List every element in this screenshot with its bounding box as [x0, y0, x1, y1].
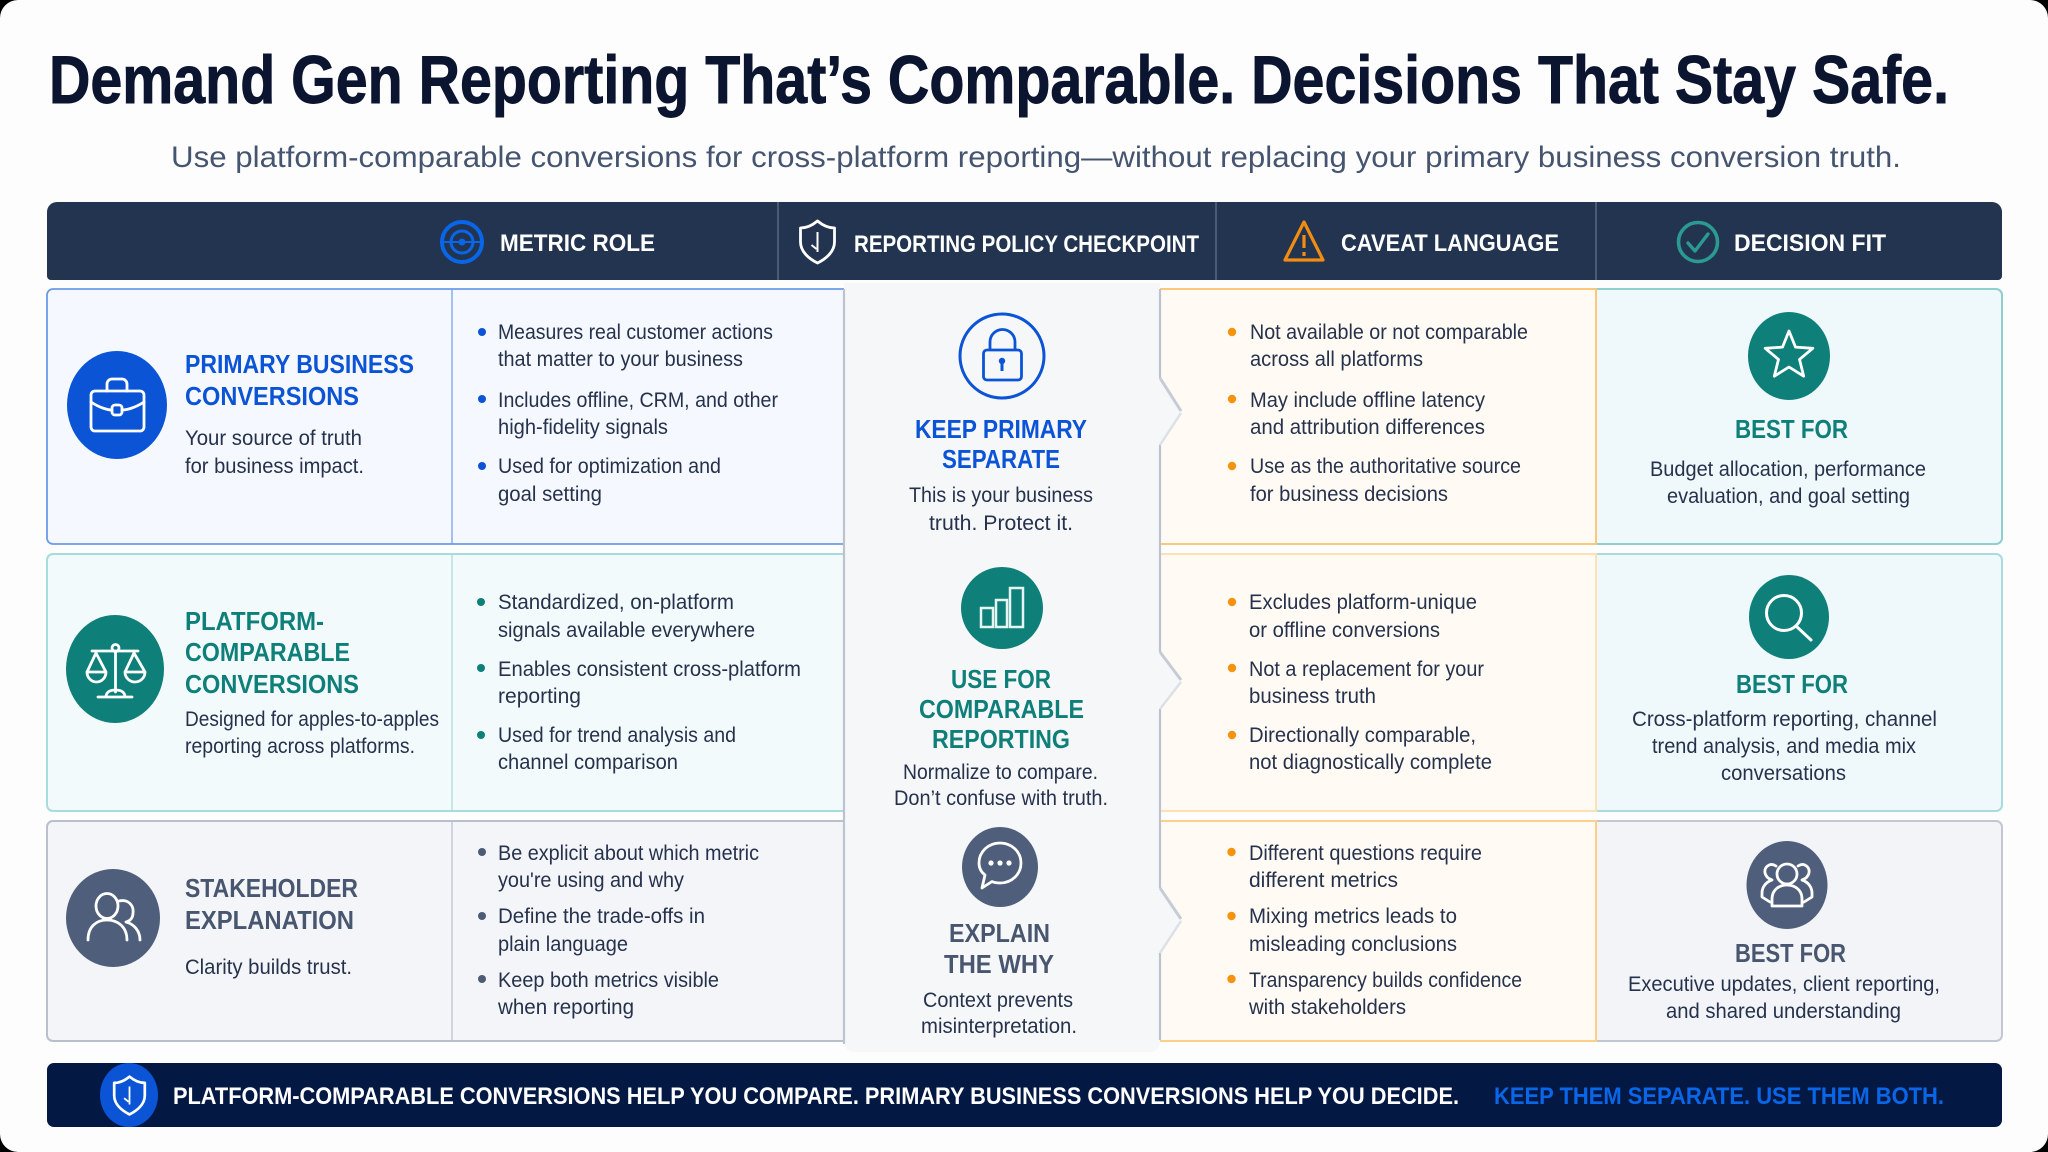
- icon: banner shield: [100, 1063, 158, 1127]
- panel: row 1 caveats: [1150, 289, 1596, 544]
- panel: row 2 caveats: Excludes platform-unique: [1249, 591, 1477, 614]
- best for text: conversations: [1721, 762, 1846, 785]
- row description: [185, 708, 439, 758]
- panel: row 3 decision fit background: [1580, 821, 2002, 1041]
- panel: row 3 caveats: Transparency builds confidence: [1249, 969, 1522, 992]
- icon: group: [1746, 841, 1828, 929]
- heading: caveat language: CAVEAT LANGUAGE: [1341, 230, 1559, 257]
- checkpoint heading: [915, 414, 1087, 474]
- bullet list: metric role: Used for trend analysis and: [498, 724, 736, 747]
- bullet list: metric role: high-fidelity signals: [498, 416, 668, 439]
- best for text: [1650, 458, 1926, 508]
- panel: row 1 caveats: across all platforms: [1250, 348, 1423, 371]
- best for heading: BEST FOR: [1735, 414, 1848, 444]
- bullet list: metric role: goal setting: [498, 483, 602, 506]
- panel: row 1 caveats: Not available or not comparable: [1250, 321, 1528, 344]
- row description: Your source of truth: [185, 427, 362, 450]
- bullet list: metric role: Used for optimization and: [498, 455, 721, 478]
- bullet list: metric role: signals available everywhere: [498, 619, 755, 642]
- bullet list: metric role: that matter to your business: [498, 348, 743, 371]
- panel: row 3 caveats: different metrics: [1249, 869, 1398, 892]
- checkpoint heading: SEPARATE: [942, 444, 1060, 474]
- checkpoint text: [909, 484, 1093, 535]
- checkpoint heading: COMPARABLE: [919, 694, 1084, 724]
- checkpoint text: truth. Protect it.: [929, 512, 1073, 535]
- panel: row 1 decision fit background: [1580, 289, 2002, 544]
- best for text: Cross-platform reporting, channel: [1632, 708, 1937, 731]
- bullet list: metric role: Standardized, on-platform: [498, 591, 734, 614]
- row description: Designed for apples-to-apples: [185, 708, 439, 731]
- table header bar: [47, 202, 2002, 280]
- best for text: [1632, 708, 1937, 785]
- best for text: and shared understanding: [1666, 1000, 1901, 1023]
- icon: target: [440, 222, 484, 262]
- bullet list: metric role: plain language: [498, 933, 628, 956]
- checkpoint text: This is your business: [909, 484, 1093, 507]
- panel: row 2 decision fit: [1632, 575, 1937, 785]
- row label: [185, 606, 359, 699]
- bullet list: metric role: you're using and why: [498, 869, 684, 892]
- bullet list: metric role: [478, 321, 778, 506]
- row label: CONVERSIONS: [185, 669, 359, 699]
- panel: row 3 decision fit: [1628, 841, 1940, 1023]
- checkpoint text: misinterpretation.: [921, 1015, 1077, 1038]
- checkpoint heading: KEEP PRIMARY: [915, 414, 1087, 444]
- best for text: Budget allocation, performance: [1650, 458, 1926, 481]
- panel: row 1 decision fit: [1650, 312, 1926, 508]
- checkpoint text: Normalize to compare.: [903, 761, 1098, 784]
- panel: row 3 caveats: [1150, 821, 1596, 1041]
- heading: decision fit: DECISION FIT: [1734, 230, 1886, 257]
- bullet list: metric role: [477, 591, 801, 774]
- icon: star: [1748, 312, 1830, 400]
- bullet list: metric role: Enables consistent cross-platform: [498, 658, 801, 681]
- panel: row 2 caveats: not diagnostically complete: [1249, 751, 1492, 774]
- panel: row 3 caveats: Mixing metrics leads to: [1249, 905, 1457, 928]
- row description: reporting across platforms.: [185, 735, 415, 758]
- icon: people: [66, 869, 160, 967]
- bullet list: metric role: Keep both metrics visible: [498, 969, 719, 992]
- bullet list: metric role: [478, 842, 759, 1019]
- icon: scales: [66, 615, 164, 723]
- panel: row 2 caveats: [1150, 554, 1596, 811]
- checkpoint text: Don’t confuse with truth.: [894, 787, 1108, 810]
- best for text: trend analysis, and media mix: [1652, 735, 1916, 758]
- icon: warning: [1285, 222, 1323, 260]
- checkpoint heading: EXPLAIN: [949, 918, 1050, 948]
- panel: row 1 caveats: Use as the authoritative source: [1250, 455, 1521, 478]
- checkpoint text: [894, 761, 1108, 810]
- best for heading: BEST FOR: [1735, 938, 1846, 968]
- bullet list: metric role: Includes offline, CRM, and other: [498, 389, 778, 412]
- banner: [47, 1063, 2002, 1127]
- icon: briefcase: [67, 351, 167, 459]
- panel: row 1 caveats: and attribution differences: [1250, 416, 1485, 439]
- banner call to action: KEEP THEM SEPARATE. USE THEM BOTH.: [1494, 1083, 1944, 1110]
- panel: row 2 caveats: Not a replacement for your: [1249, 658, 1484, 681]
- checkpoint heading: THE WHY: [944, 949, 1054, 979]
- row label: PLATFORM-: [185, 606, 324, 636]
- panel: row 3 caveats: misleading conclusions: [1249, 933, 1457, 956]
- checkpoint text: Context prevents: [923, 989, 1073, 1012]
- icon: shield: [800, 221, 834, 263]
- banner message: PLATFORM-COMPARABLE CONVERSIONS HELP YOU COMPARE. PRIMARY BUSINESS CONVERSIONS HELP YOU DECIDE.: [173, 1083, 1459, 1110]
- row description: for business impact.: [185, 455, 364, 478]
- row label: COMPARABLE: [185, 637, 350, 667]
- best for text: Executive updates, client reporting,: [1628, 973, 1940, 996]
- row label: EXPLANATION: [185, 905, 354, 935]
- panel: row 1 caveats: for business decisions: [1250, 483, 1448, 506]
- row label: PRIMARY BUSINESS: [185, 349, 414, 379]
- row label: [185, 873, 358, 935]
- panel: row 2 caveats: or offline conversions: [1249, 619, 1440, 642]
- panel: row 2 decision fit background: [1580, 554, 2002, 811]
- bullet list: metric role: reporting: [498, 685, 581, 708]
- panel: row 1 caveats: May include offline latency: [1250, 389, 1485, 412]
- checkpoint heading: [944, 918, 1054, 979]
- best for heading: BEST FOR: [1736, 669, 1848, 699]
- bullet list: metric role: Define the trade-offs in: [498, 905, 705, 928]
- row label: [185, 349, 414, 411]
- panel: row 1 primary business conversions: [47, 289, 857, 544]
- row label: STAKEHOLDER: [185, 873, 358, 903]
- panel: row 3 caveats: with stakeholders: [1248, 996, 1406, 1019]
- icon: speech bubble: [962, 827, 1038, 907]
- icon: bar chart: [961, 567, 1043, 649]
- subtitle: Use platform-comparable conversions for cross-platform reporting—without replacing your primary business conversion truth.: [171, 141, 1901, 174]
- icon: check circle: [1678, 222, 1718, 262]
- panel: reporting policy checkpoint column: [844, 283, 1182, 1052]
- checkpoint heading: REPORTING: [932, 724, 1070, 754]
- bullet list: metric role: Measures real customer actions: [498, 321, 773, 344]
- icon: lock: [960, 314, 1044, 398]
- row description: [185, 427, 364, 478]
- heading: metric role: METRIC ROLE: [500, 230, 655, 257]
- checkpoint heading: [919, 664, 1084, 754]
- bullet list: metric role: when reporting: [497, 996, 634, 1019]
- best for text: [1628, 973, 1940, 1023]
- icon: magnifier: [1749, 575, 1829, 659]
- checkpoint text: [921, 989, 1077, 1038]
- panel: row 2 platform-comparable conversions: [47, 554, 857, 811]
- bullet list: metric role: channel comparison: [498, 751, 678, 774]
- row description: Clarity builds trust.: [185, 956, 352, 979]
- heading: reporting policy checkpoint: REPORTING POLICY CHECKPOINT: [854, 231, 1199, 258]
- best for text: evaluation, and goal setting: [1667, 485, 1910, 508]
- bullet list: metric role: Be explicit about which metric: [498, 842, 759, 865]
- panel: row 2 caveats: business truth: [1249, 685, 1376, 708]
- panel: row 3 caveats: Different questions require: [1249, 842, 1482, 865]
- panel: row 3 stakeholder explanation: [47, 821, 857, 1041]
- row label: CONVERSIONS: [185, 381, 359, 411]
- panel: row 2 caveats: Directionally comparable,: [1249, 724, 1476, 747]
- checkpoint heading: USE FOR: [951, 664, 1051, 694]
